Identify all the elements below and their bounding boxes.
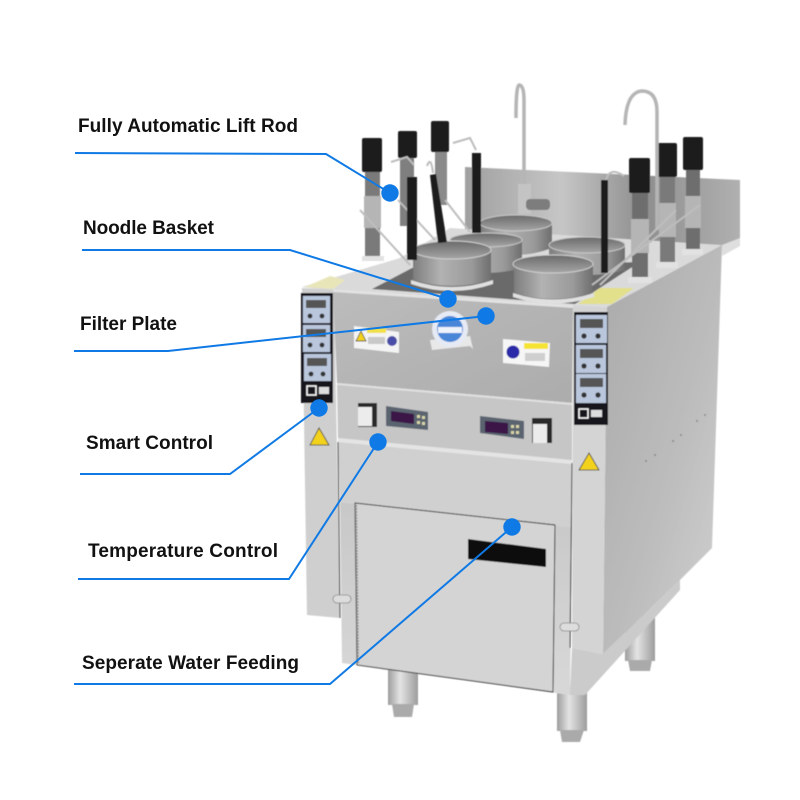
thermostat right [480,416,524,439]
lift rods [362,150,703,283]
basin cavity [372,262,640,304]
lift rod caps [362,121,703,193]
noodle cooker machine [301,85,740,742]
yellow shelf marking [305,276,345,289]
right side panel [603,245,722,654]
callout: Filter Plate: Filter Plate [80,314,177,335]
heat warning triangle right [579,453,599,470]
control fascia [337,383,572,463]
heat warning triangle left [310,428,329,445]
pot back right [549,237,625,275]
callout: Noodle Basket [82,218,457,308]
warning sticker left [354,326,399,353]
door handle [468,539,546,567]
callout: Temperature Control [78,433,387,579]
pot back left [450,233,522,273]
callout: Temperature Control: Temperature Control [88,541,278,562]
lower fascia [338,442,572,527]
left column [302,288,340,618]
callout: Smart Control [80,399,328,474]
right control panels [574,312,608,425]
right column [572,305,607,654]
door hinge line [356,505,358,664]
side vents [645,414,706,462]
callout: Fully Automatic Lift Rod [75,116,399,202]
yellow deck marking [578,288,634,304]
callout: Filter Plate [74,307,495,351]
callout: Noodle Basket: Noodle Basket [83,218,215,239]
thermostat left [386,406,428,430]
upper front panel [333,289,573,403]
left control panels [301,293,333,403]
pots [411,215,625,304]
pot front left [411,241,493,291]
back splash [465,167,740,256]
faucet base [518,184,550,214]
switch left [358,403,377,427]
under base [570,580,680,695]
hinges [333,595,579,631]
warning sticker right [503,339,550,367]
faucet right [625,91,657,230]
basket arms [360,138,700,285]
column gap lines [338,442,572,648]
basket handles [407,153,608,273]
callout: Fully Automatic Lift Rod: Fully Automatic Lift Rod [78,116,298,137]
certification badge [430,311,473,350]
pot back centre [480,215,552,255]
switch right [532,418,552,443]
pot front right [513,255,594,304]
faucet left [516,85,524,213]
door [355,503,555,692]
top deck [302,228,722,307]
callout: Smart Control: Smart Control [86,433,213,454]
callout: Seperate Water Feeding [74,518,521,684]
callout: Seperate Water Feeding: Seperate Water Feeding [82,653,299,674]
lower frame [340,502,572,695]
legs [388,613,655,742]
